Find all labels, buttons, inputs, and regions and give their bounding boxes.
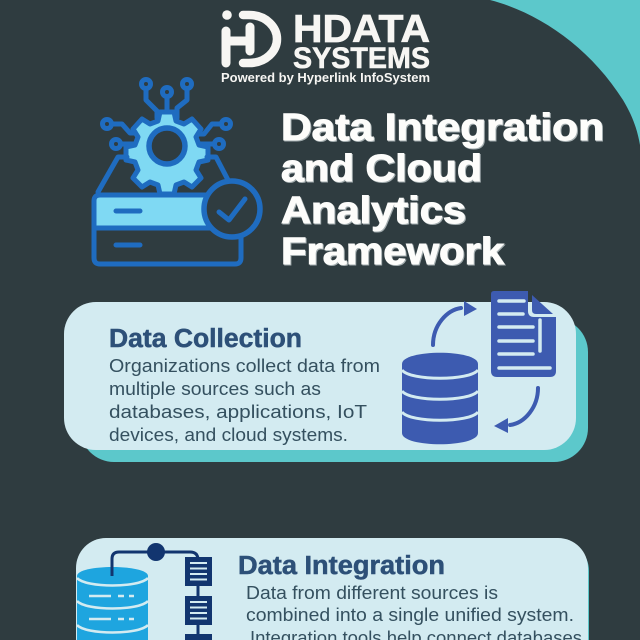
body text — [109, 356, 380, 445]
circuit nodes — [102, 80, 230, 148]
body text: devices, and cloud systems. — [109, 425, 348, 445]
logo name: HDATA — [293, 8, 430, 51]
body text: Organizations collect data from — [109, 356, 380, 376]
logo name: Powered by Hyperlink InfoSystem — [221, 70, 430, 85]
icon: database with gear — [94, 80, 260, 264]
icon: connected database — [77, 543, 212, 640]
icon: document — [491, 291, 556, 377]
logo name — [221, 8, 430, 85]
title: Data Integration — [281, 107, 604, 149]
body text — [246, 583, 582, 640]
title: Framework — [281, 231, 505, 273]
panel: data integration — [76, 538, 589, 640]
title: Analytics — [281, 190, 466, 232]
icon: logo mark — [222, 10, 277, 63]
panel: data collection — [64, 291, 588, 462]
body text: databases, applications, IoT — [109, 402, 367, 422]
check badge — [204, 181, 260, 237]
arrow: database to document — [433, 301, 477, 345]
arrow: document to database — [494, 388, 538, 433]
title: and Cloud — [281, 148, 482, 190]
logo name: SYSTEMS — [293, 42, 430, 75]
teal corner shape — [490, 0, 640, 145]
server box — [94, 157, 241, 264]
body text: combined into a single unified system. — [246, 605, 574, 625]
title — [281, 107, 604, 273]
gear — [126, 112, 208, 194]
body text: Data from different sources is — [246, 583, 498, 603]
body text: multiple sources such as — [109, 379, 321, 399]
icon: database — [402, 353, 478, 444]
heading: Data Collection — [109, 325, 302, 353]
logo — [221, 8, 430, 85]
heading: Data Integration — [238, 552, 445, 580]
